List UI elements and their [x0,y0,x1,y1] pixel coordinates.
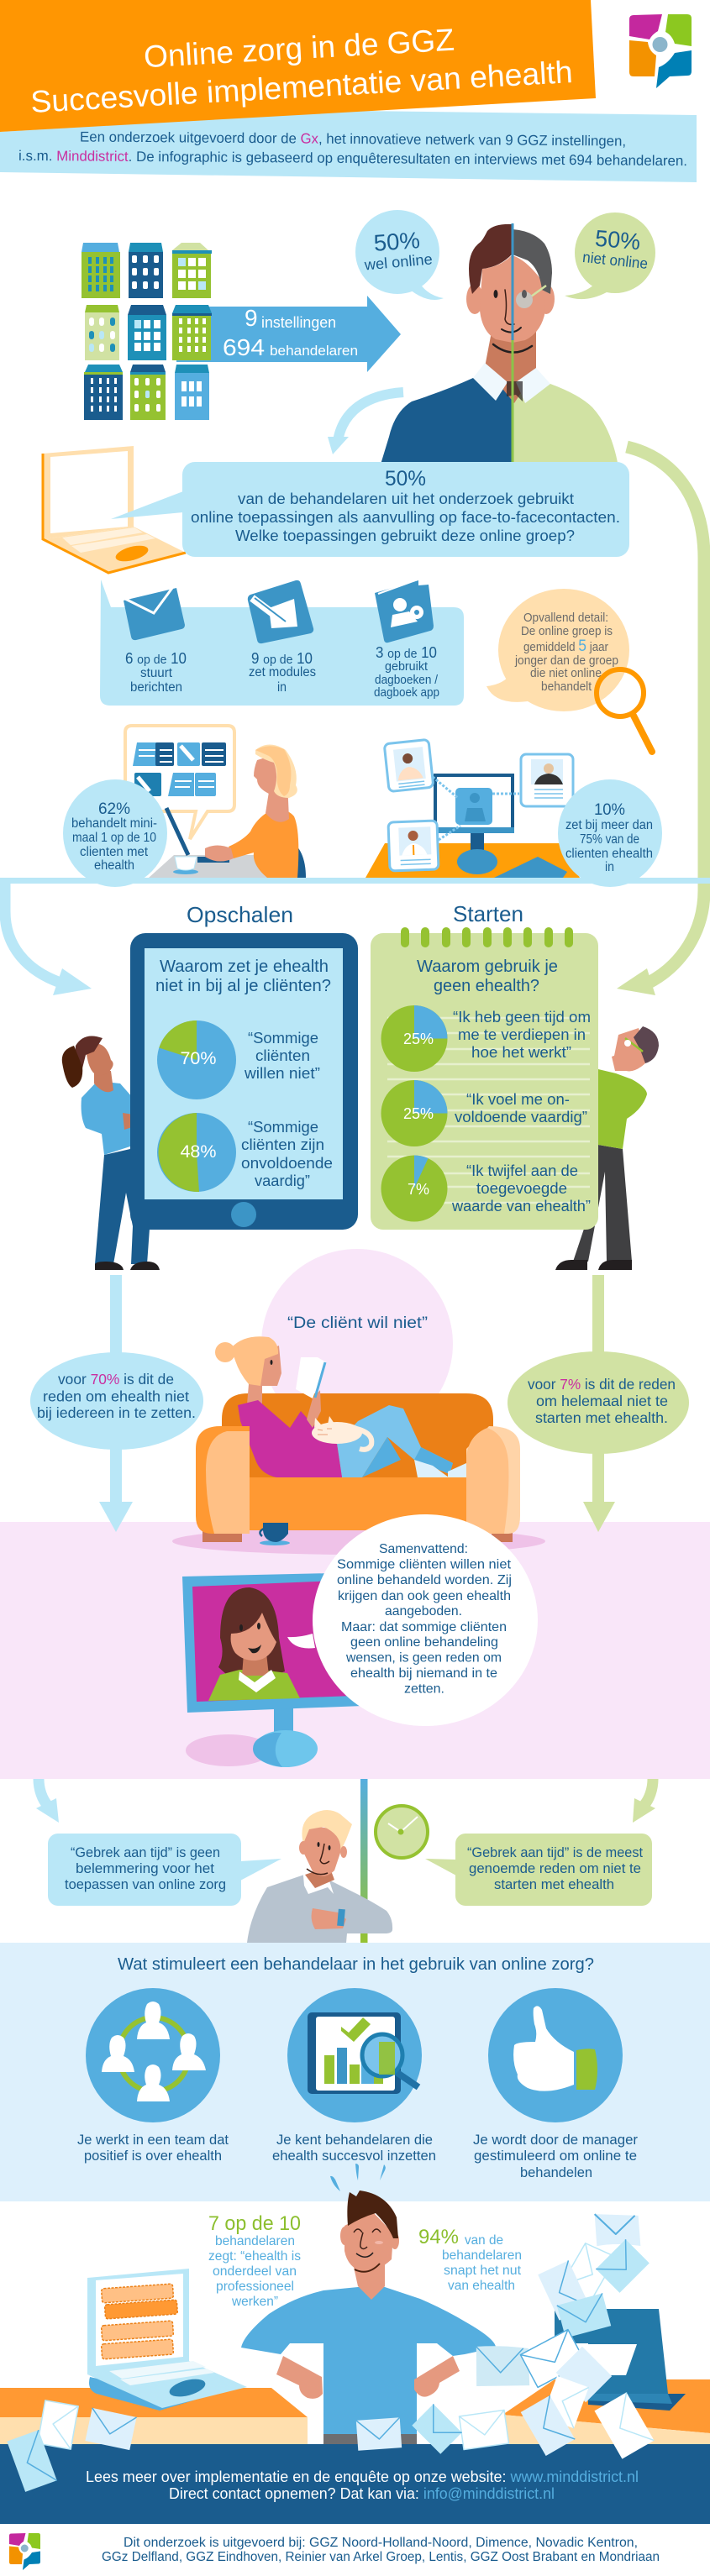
neck [353,2264,385,2300]
quote: willen niet [244,1029,320,1082]
monitor with therapist woman [182,1573,363,1767]
stat: 7 op de 10: onderdeel van [213,2264,297,2279]
bubble: Samenvattend: krijgen dan ook geen ehealth [338,1589,511,1603]
quote: onvoldoende vaardig: onvoldoende [241,1154,333,1172]
icon: results tablet [287,1988,422,2122]
label: team [77,2132,229,2164]
question: geen ehealth? [434,977,539,995]
face [231,1613,276,1660]
label: berichten [125,650,187,695]
pie: 48%: 48% [180,1141,217,1162]
couch seat [249,1477,467,1530]
heading: Starten: Starten [453,901,523,926]
woman reading [215,1336,466,1477]
arrow: blue down with 70%: bij iedereen in te zetten. [37,1404,196,1421]
flying envelopes [7,2214,655,2492]
pie: 25% [381,1005,447,1072]
arrow: blue down with 70%: voor 70% is dit de [58,1371,174,1388]
label: berichten: stuurt [140,666,173,680]
bubble: Samenvattend: geen online behandeling [350,1635,498,1650]
bubble: 50% niet online: 50% [594,225,641,254]
envelope 11 [594,2392,655,2459]
bubble: opvallend detail: Opvallend detail: [523,611,608,625]
bubble: Samenvattend: zetten. [404,1681,444,1697]
card 2 [521,754,573,806]
table right [502,2379,710,2444]
laptop screen edge [166,808,229,863]
bubble: opvallend detail: gemiddeld 5 jaar [523,637,608,655]
panel: wat stimuleert [0,1943,710,2201]
envelope 16 [85,2408,137,2450]
label: team: positief is over ehealth [84,2148,222,2164]
pie: 70% [157,1020,236,1099]
arrow text: 694 [223,334,265,360]
bubble: geen belemmering: belemmering voor het [76,1860,214,1876]
bubble: De cliënt wil niet: “De cliënt wil niet” [287,1314,428,1332]
intro text [18,129,687,169]
bubble: opvallend detail: jonger dan de groep [514,654,618,668]
form fields [101,2284,177,2359]
panel: 50% question bubble: online toepassingen als aanvulling op face-to-facecontacten. [191,509,620,526]
label: manager: behandelen [520,2164,592,2180]
arrow: 9 instellingen, 694 behandelaren [172,296,401,372]
icon: magnifier [597,669,652,752]
building 2 [129,243,163,298]
pie: 7%: 7% [408,1181,429,1198]
label: manager [473,2132,638,2180]
bubble: 10%: 75% van de [580,832,639,847]
man with hands on hips [241,2190,496,2446]
heading: Opschalen: Opschalen [187,902,293,927]
bubble: 62%: behandelt mini- [71,816,157,831]
footer text: GGz Delfland, GGZ Eindhoven, Reinier van Arkel Groep, Lentis, GGZ Oost Brabant en Mondriaan [102,2550,660,2564]
quote: toegevoegde waarde: waarde van ehealth” [451,1198,591,1215]
stat: 7 op de 10: 7 op de 10 [208,2212,301,2235]
envelope 15 [38,2400,78,2449]
quote: willen niet: “Sommige [248,1029,318,1047]
joy lines [330,2164,386,2191]
hair right [513,229,552,294]
envelope 10 [521,2395,575,2456]
forearm left [276,2356,323,2399]
footer band [0,2444,710,2524]
intro band [0,111,697,182]
bubble: Samenvattend: ehealth bij niemand in te [350,1666,497,1681]
glasses and eye [516,286,546,308]
title banner [0,0,596,132]
label: succesvol [272,2132,436,2164]
panel: 50% question bubble: van de behandelaren uit het onderzoek gebruikt [238,491,574,507]
woman [205,744,298,878]
bubble: 10% [558,779,662,887]
laptop: orange [43,446,186,573]
logo [629,14,692,88]
stat: 94%: snapt het nut [444,2264,522,2278]
bubble: meest genoemde reden: “Gebrek aan tijd” is de meest [467,1844,643,1860]
neck [242,1653,269,1676]
bubble: geen belemmering [48,1834,281,1906]
sweater [208,1670,300,1701]
heading: Wat stimuleert een behandelaar in het gebruik van online zorg? [118,1955,594,1974]
bubble: 10%: clienten ehealth [565,847,653,861]
quote: onvoldoende vaardig: vaardig” [255,1172,310,1189]
quote: willen niet: willen niet” [244,1064,320,1082]
laptop: dark blue right [555,2309,686,2411]
quote: onvoldoende vaardig: “Sommige [248,1118,318,1136]
figure: woman left of tablet [62,1036,160,1270]
bubble: 62%: 62% [98,800,130,818]
pie: 25% [381,1080,447,1146]
ears [466,284,483,314]
cable dots [433,777,519,840]
quote: toegevoegde waarde: toegevoegde [476,1180,567,1197]
torso and sleeves [241,2286,496,2434]
stat: 7 op de 10: zegt: “ehealth is [208,2249,301,2264]
footer text: Dit onderzoek is uitgevoerd bij: GGZ Noord-Holland-Noord, Dimence, Novadic Kentron, [124,2536,638,2550]
label: succesvol: ehealth succesvol inzetten [272,2148,436,2164]
label: succesvol: Je kent behandelaren die [276,2132,433,2148]
envelope 5 [557,2293,611,2338]
bubble: geen belemmering: “Gebrek aan tijd” is geen [71,1844,220,1860]
right armrest [466,1426,520,1534]
center divider [360,1779,368,1943]
tablet panel: Opschalen [130,933,358,1230]
arrow: green down with 7%: voor 7% is dit de reden [528,1376,676,1393]
label: dagboeken [374,644,439,700]
scene: client on couch [172,1336,545,1555]
envelope 2 [561,2240,616,2302]
bubble: opvallend detail: De online groep is [521,625,613,638]
bubble: opvallend detail [486,589,629,711]
arrow: blue down with 70%: reden om ehealth niet [43,1388,189,1404]
label: berichten: 6 op de 10 [125,650,187,667]
label: dagboeken: 3 op de 10 [376,644,437,661]
center line [511,223,514,466]
belt [323,2434,417,2446]
scene: behandelaar at desk [125,726,306,878]
icon: clock [376,1806,428,1858]
bubble: 50% wel online [355,210,444,300]
couch back [222,1393,493,1482]
bubble: De cliënt wil niet [261,1249,453,1439]
cat [312,1416,371,1450]
curved arrow: green to Gebrek aan tijd [633,1779,655,1823]
stat: 94%: van ehealth [448,2279,515,2293]
bubble: 50% niet online: niet online [581,249,649,272]
sweater right [513,384,618,467]
label: berichten: berichten [130,680,182,695]
keyboard [494,857,567,878]
stat: 94%: 94% [418,2226,459,2248]
bubble: Samenvattend: Sommige cliënten willen niet [337,1557,512,1572]
building 8 [130,365,166,420]
label: manager: gestimuleerd om online te [474,2148,637,2164]
face [480,255,545,343]
title: Succesvolle implementatie van ehealth [29,55,574,119]
quote: willen niet: cliënten [255,1047,310,1064]
desk [149,855,273,878]
title: Online zorg in de GGZ [143,23,455,74]
envelope 12 [459,2410,509,2450]
quote: geen tijd [453,1009,591,1061]
building 3 [172,243,212,298]
bubble: Samenvattend: aangeboden. [385,1604,462,1619]
arrow: blue down with 70% [30,1275,203,1532]
arrow: green down with 7%: om helemaal niet te [536,1393,668,1409]
stat: 94%: behandelaren [442,2248,522,2263]
pie: 25%: 25% [403,1031,434,1047]
bubble: Samenvattend: online behandeld worden. Zij [337,1573,512,1587]
icon: team [86,1988,220,2122]
bubble: opvallend detail: behandelt [541,680,592,694]
label: modules [249,650,316,695]
scene: monitor with contact cards [366,739,580,878]
building 9 [175,365,209,420]
shirt collars [473,363,508,401]
curved arrow: blue to Gebrek aan tijd [36,1779,59,1823]
sweater left [380,378,513,467]
envelope 6 [475,2345,531,2388]
quote: geen tijd: “Ik heb geen tijd om [453,1009,591,1026]
label: modules: in [277,680,287,695]
forearm right [414,2356,460,2397]
bubble: meest genoemde reden: starten met ehealth [494,1876,614,1892]
building 6 [172,305,212,360]
bubble: Samenvattend: wensen, is geen reden om [345,1651,502,1665]
bubble: 62%: ehealth [94,858,134,873]
divider and left arrow: blue [0,878,710,995]
shadow [172,1528,545,1555]
label: dagboeken: dagboeken / [375,673,439,687]
footer logo [9,2533,40,2570]
envelope 1 [593,2214,642,2248]
desk [366,843,580,878]
quote: onvoldoende vaardig: voldoende vaardig” [455,1109,587,1125]
building 1 [82,243,120,298]
laptop: blue left [87,2269,247,2411]
monitor [434,774,514,874]
table left [0,2388,308,2444]
figure: man checking watch [247,1810,392,1943]
panel: 50% question bubble [111,462,629,557]
envelope 14 [356,2417,402,2451]
arrow: green down with 7%: starten met ehealth. [535,1409,668,1426]
bubble: 50% wel online: 50% [373,227,421,256]
bubble: opvallend detail: die niet online [530,667,602,680]
bubble: geen belemmering: toepassen van online zorg [65,1876,226,1892]
curved arrow: blue [328,392,403,454]
intro text: i.s.m. Minddistrict. De infographic is gebaseerd op enquêteresultaten en interviews met 694 behandelaren. [18,148,687,169]
cup [260,1523,290,1545]
notepad panel: Starten [371,927,598,1230]
bubble: Samenvattend: Maar: dat sommige cliënten [341,1620,507,1634]
quote: onvoldoende vaardig [241,1118,333,1189]
building 5 [128,305,166,360]
footer text [102,2536,660,2564]
title [29,23,574,119]
person: half online half offline [380,223,618,467]
stat: 7 op de 10: behandelaren [215,2234,295,2248]
big curved arrow: green [617,447,704,995]
neck [485,332,536,403]
building 4 [85,305,119,360]
question: niet in bij al je cliënten? [155,977,331,995]
icon: pencil module [248,580,313,643]
envelope 13 [412,2404,462,2454]
couch legs [202,1529,513,1542]
bubble: meest genoemde reden [425,1834,652,1906]
bubble: 62%: maal 1 op de 10 [72,831,156,845]
bubble: Samenvattend: Samenvattend: [379,1542,468,1556]
question: Waarom zet je ehealth [160,957,329,976]
bubble: 10%: in [605,860,614,874]
stat: 94%: van de [465,2233,503,2248]
quote: onvoldoende vaardig: cliënten zijn [241,1136,324,1153]
pie: 25%: 25% [403,1105,434,1122]
bubble: Samenvattend [287,1514,538,1726]
building 7 [84,365,123,420]
arrow text [223,305,358,360]
hair [347,2190,398,2238]
quote: geen tijd: me te verdiepen in [458,1026,586,1043]
quote: geen tijd: hoe het werkt” [471,1044,571,1061]
arrow text: instellingen [261,314,336,331]
footer band: Direct contact opnemen? Dat kan via: info@minddistrict.nl [169,2485,555,2502]
envelope 4 [538,2260,590,2321]
icon: envelope [124,588,185,640]
envelope 17 [7,2430,57,2492]
hair [218,1587,285,1676]
envelope 9 [542,2376,589,2428]
envelope 8 [556,2347,612,2402]
stat: 94% [418,2226,522,2293]
bubble: 10%: 10% [594,800,625,819]
facial features [493,290,532,353]
bubble: 50% wel online: wel online [363,250,433,274]
cup [173,857,198,874]
card 3 [388,821,439,871]
stat: 7 op de 10: werken” [231,2295,278,2309]
panel: toepassingen [100,580,464,706]
bubble: 50% niet online [565,212,655,299]
speech panel with documents [125,726,234,839]
arrow text: 9 [245,305,258,331]
buildings [82,243,212,420]
label: team: Je werkt in een team dat [77,2132,229,2148]
panel: 50% question bubble: 50% [385,467,426,491]
icon: diary [375,580,434,643]
pink section [0,1522,710,1779]
book [296,1357,326,1398]
bubble: 62% [63,779,167,887]
quote: onvoldoende vaardig: “Ik voel me on- [466,1091,570,1108]
stat: 7 op de 10: professioneel [216,2280,294,2294]
question [155,957,331,995]
left armrest [196,1426,250,1534]
arrow text: behandelaren [270,343,358,359]
bubble: 10%: zet bij meer dan [565,818,653,832]
intro text: Een onderzoek uitgevoerd door de Gx, het innovatieve netwerk van 9 GGZ instellingen, [80,129,626,150]
label: dagboeken: dagboek app [374,685,439,700]
pie: 70%: 70% [180,1048,217,1068]
arrow: green down with 7% [508,1275,689,1532]
chair [292,846,306,878]
face details [354,2229,381,2272]
figure: man right of notepad [555,1026,659,1270]
label: manager: Je wordt door de manager [473,2132,638,2148]
bubble: 62%: clienten met [80,845,149,859]
label: dagboeken: gebruikt [385,659,429,674]
question: Waarom gebruik je [417,957,558,976]
stat: 7 op de 10 [208,2212,301,2309]
label: modules: zet modules [249,665,316,679]
quote: toegevoegde waarde: “Ik twijfel aan de [466,1162,578,1179]
panel: 50% question bubble: Welke toepassingen gebruikt deze online groep? [235,527,575,544]
pie: 7% [381,1156,447,1221]
envelope 7 [520,2330,586,2387]
card 1 [384,739,434,792]
pie: 48% [157,1113,236,1192]
envelope 3 [596,2239,650,2293]
hair left [469,224,513,294]
icon: thumb up [488,1988,623,2122]
footer band: Lees meer over implementatie en de enquête op onze website: www.minddistrict.nl [86,2468,639,2485]
question [417,957,558,995]
quote: toegevoegde waarde [451,1162,591,1215]
quote: onvoldoende vaardig [455,1091,587,1125]
label: modules: 9 op de 10 [251,650,313,667]
bubble: meest genoemde reden: genoemde reden om niet te [469,1860,641,1876]
ears and face [340,2209,399,2272]
rings [401,927,573,947]
